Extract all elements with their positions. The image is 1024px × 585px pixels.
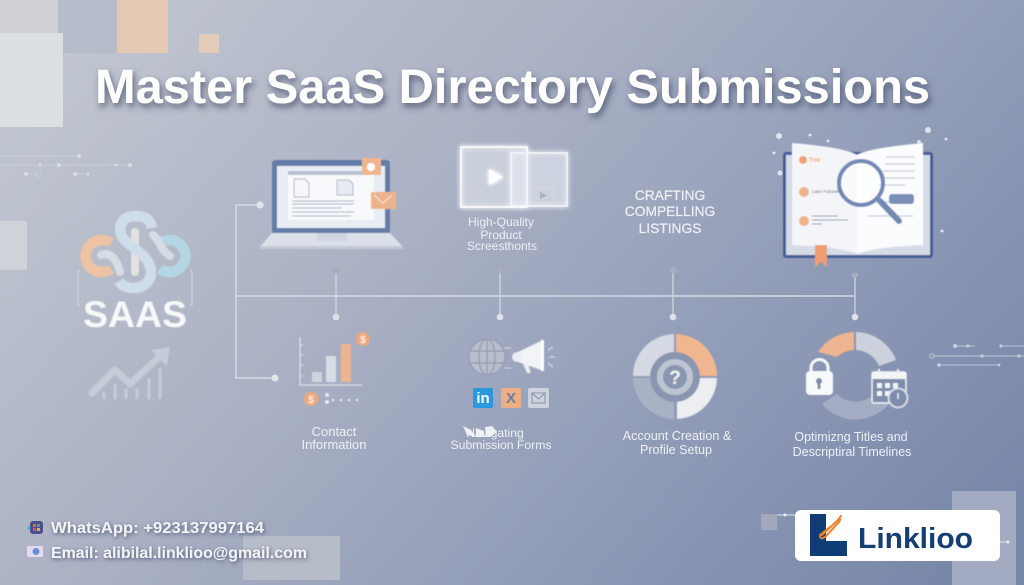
icon: lock and calendar ring [806, 332, 908, 419]
connector nodes [256, 202, 858, 382]
icon: LinkedIn: in [476, 390, 490, 407]
label: screenshots: Screesthonts [467, 239, 537, 253]
email text: Email: alibilal.linklioo@gmail.com [51, 545, 307, 562]
icon: bar chart: $ [308, 395, 314, 406]
icon: bar chart: $ [360, 335, 366, 346]
label: optimizing titles: Descriptiral Timelines [793, 445, 911, 459]
logo card: Linklioo: Linklioo [858, 523, 973, 555]
icon: open book [783, 143, 933, 267]
label: contact information: Information [301, 437, 367, 452]
glitch overlay on label [463, 426, 497, 437]
icon: whatsapp [28, 521, 43, 534]
icon: bar chart [300, 332, 370, 406]
icon: email [27, 546, 43, 557]
icon: SaaS logo [78, 216, 192, 335]
label: account creation: Profile Setup [640, 443, 712, 457]
label: screenshots: Product [480, 228, 522, 242]
icon: open book: Tnir [809, 158, 821, 164]
mail badge [371, 192, 396, 209]
camera badge [362, 158, 381, 175]
icon: X: X [506, 390, 516, 407]
heading: crafting listings: CRAFTING [635, 188, 705, 203]
label: account creation: Account Creation & [623, 429, 732, 443]
icon: globe and megaphone [469, 339, 555, 375]
label: navigating forms: Navigating [466, 426, 524, 440]
title: Master SaaS Directory Submissions [95, 61, 930, 114]
contact block [27, 520, 307, 562]
label: optimizing titles: Optimizng Titles and [794, 430, 908, 444]
heading: crafting listings: COMPELLING [625, 204, 715, 219]
icon: growth arrow [92, 347, 170, 399]
icon: question donut: ? [669, 368, 681, 389]
icon: laptop [260, 158, 403, 249]
label: screenshots: High-Quality [468, 215, 534, 229]
icon: envelope [528, 388, 549, 408]
icon: open book: Later Fallowing [812, 189, 843, 194]
whatsapp text: WhatsApp: +923137997164 [51, 520, 264, 537]
heading: crafting listings: LISTINGS [639, 221, 701, 236]
circuit lines: right [930, 344, 1024, 367]
logo card: Linklioo [777, 510, 1010, 561]
icon: LinkedIn [473, 388, 493, 408]
icon: question donut [633, 334, 717, 419]
label: contact information: Contact [312, 424, 357, 439]
icon: screenshots [461, 147, 567, 207]
timeline connectors [236, 205, 855, 378]
sparkles around book [772, 127, 948, 232]
label: navigating forms [451, 426, 551, 452]
SAAS wordmark: SAAS [83, 294, 187, 335]
icon: X [501, 388, 521, 408]
circuit lines: upper left [0, 154, 132, 177]
label: navigating forms: Submission Forms [451, 438, 551, 452]
